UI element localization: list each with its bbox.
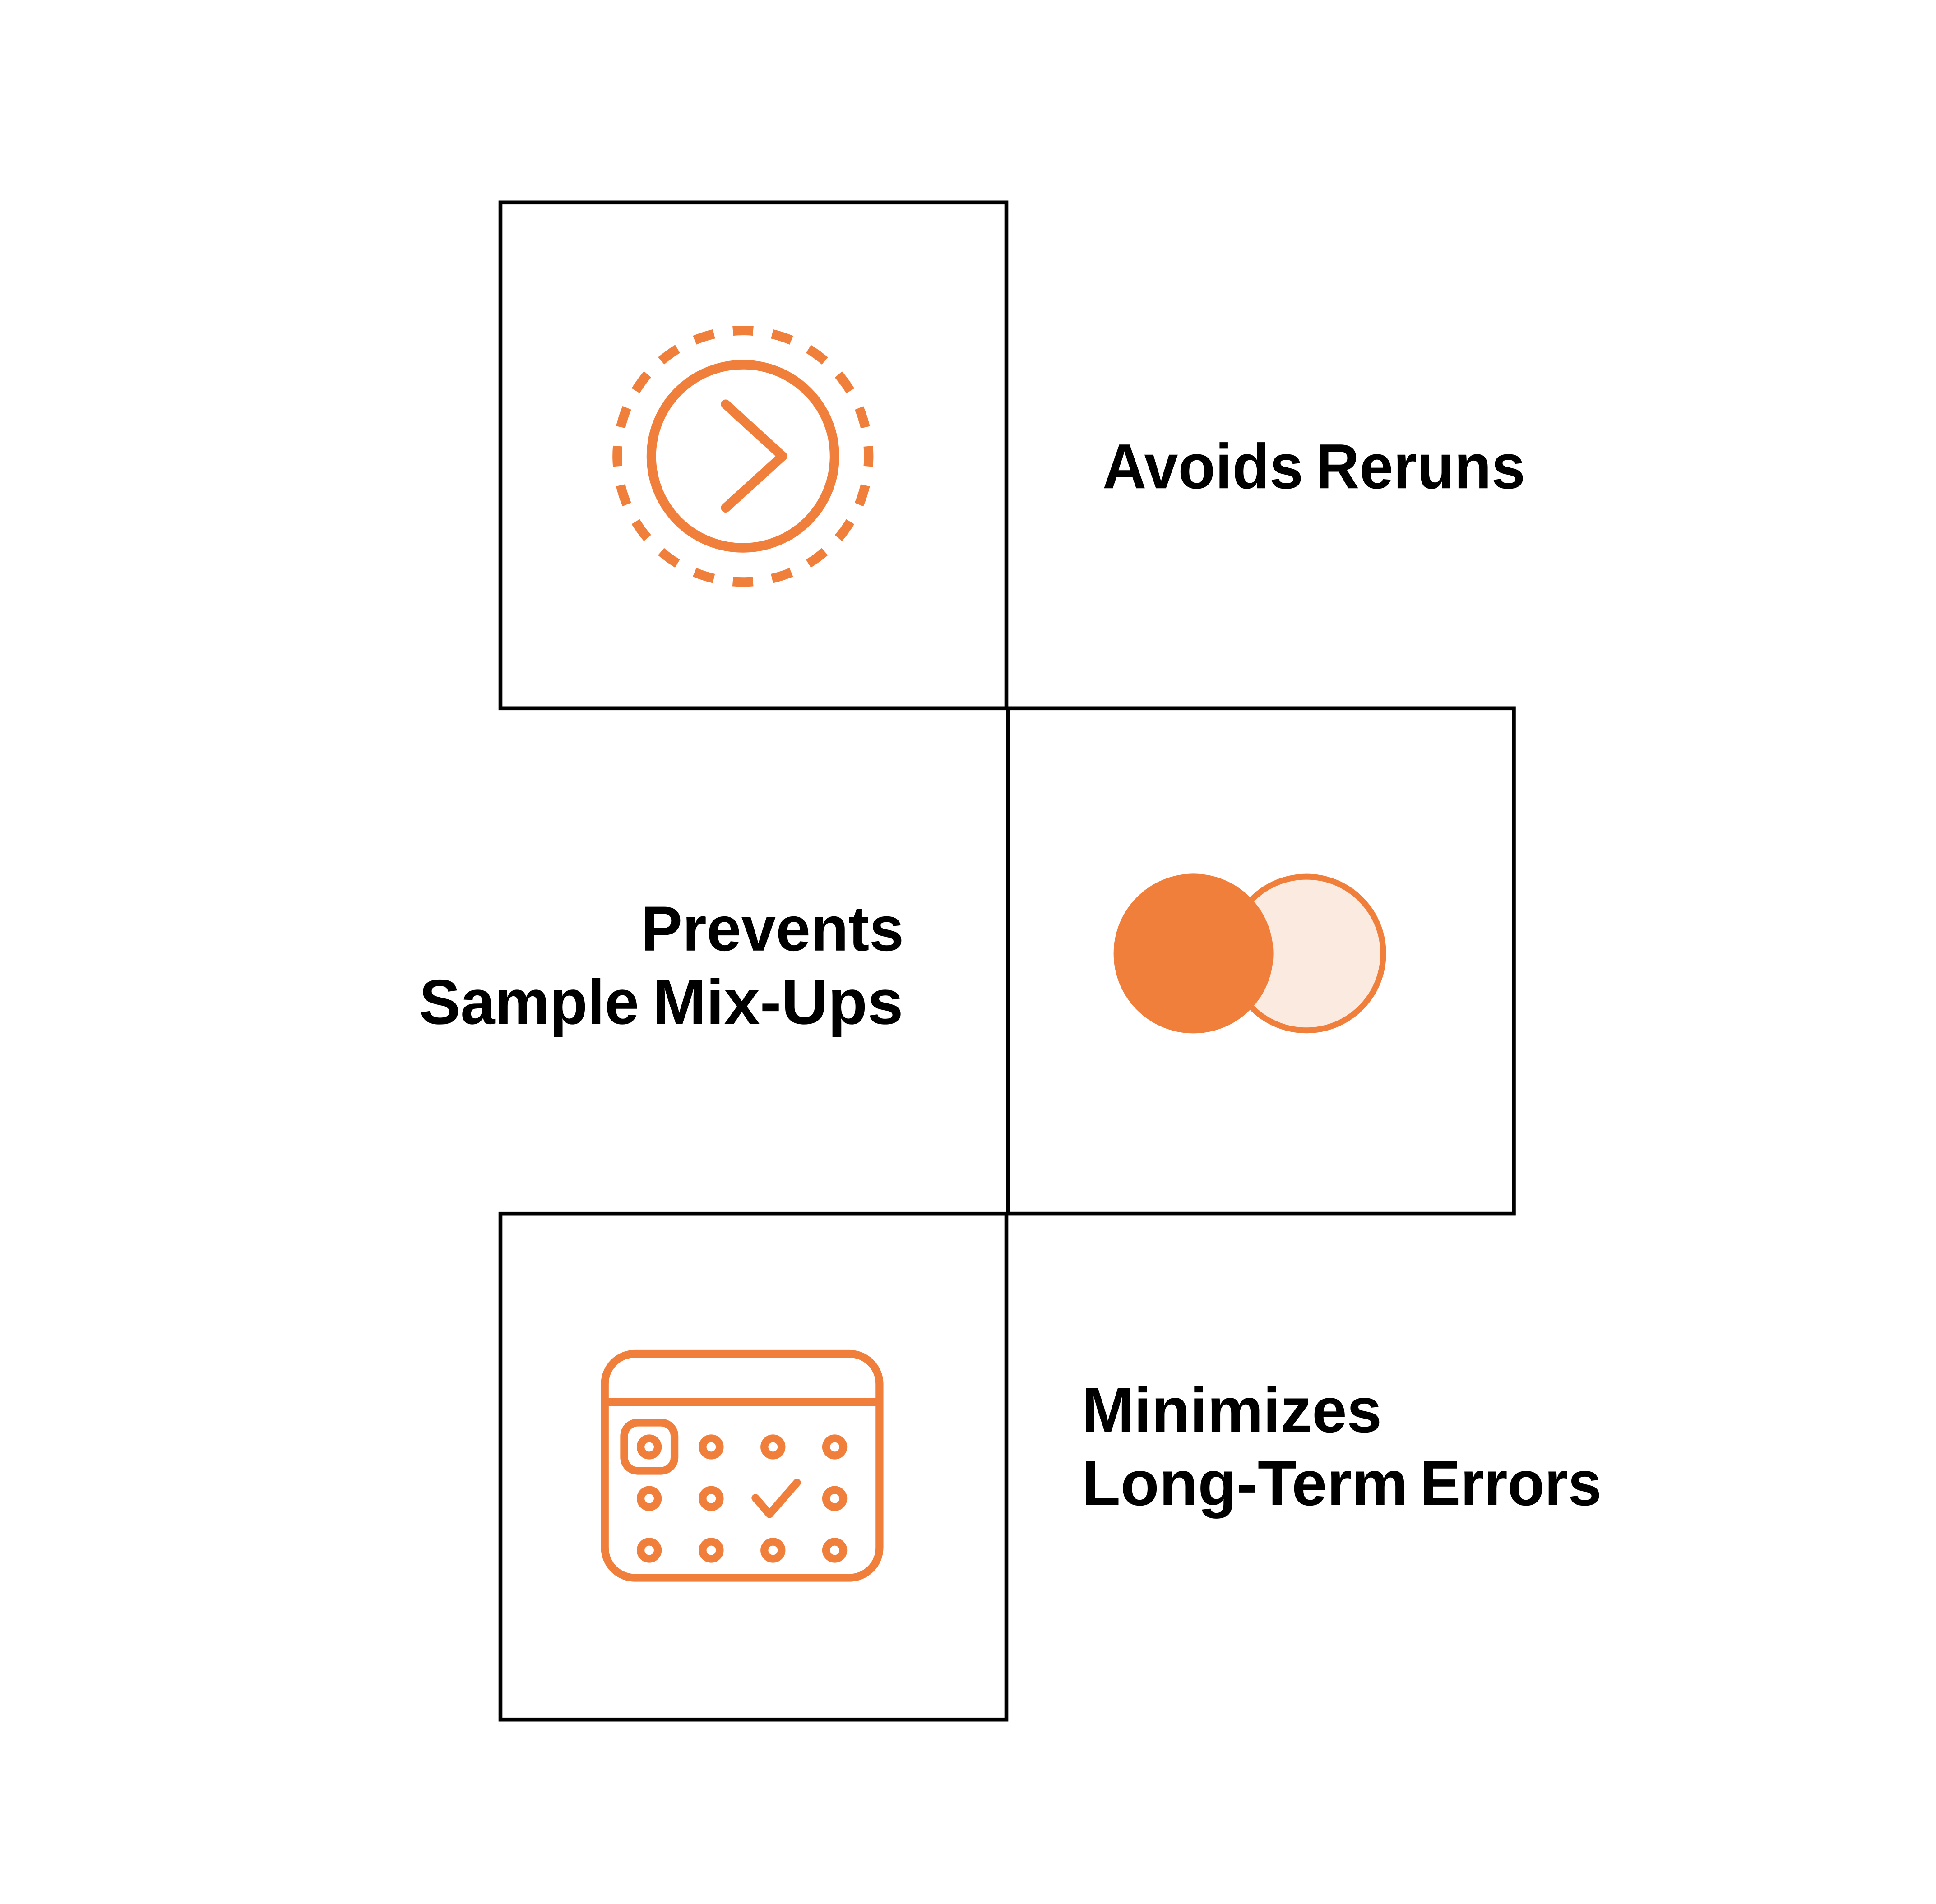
text: minimizes long-term errors (1082, 1374, 1602, 1519)
text: avoids reruns: Avoids (1102, 430, 1303, 502)
panel: minimizes long-term errors box (500, 1214, 1006, 1719)
icon: calendar with check mark (605, 1354, 880, 1578)
panel: avoids reruns box (500, 203, 1006, 708)
text: prevents sample mix-ups (419, 893, 904, 1037)
text: prevents sample mix-ups: Prevents (641, 893, 904, 964)
text: avoids reruns: Reruns (1315, 430, 1525, 502)
text: avoids reruns (1102, 430, 1525, 502)
text: prevents sample mix-ups: Mix-Ups (653, 966, 903, 1037)
text: minimizes long-term errors: Long-Term (1082, 1447, 1408, 1519)
icon: overlapping circles (1114, 873, 1383, 1033)
panel: prevents sample mix-ups box (1008, 708, 1514, 1214)
text: minimizes long-term errors: Errors (1420, 1447, 1602, 1519)
text: prevents sample mix-ups: Sample (419, 966, 639, 1037)
text: minimizes long-term errors: Minimizes (1082, 1374, 1382, 1446)
icon: dashed circle with chevron (617, 331, 869, 582)
